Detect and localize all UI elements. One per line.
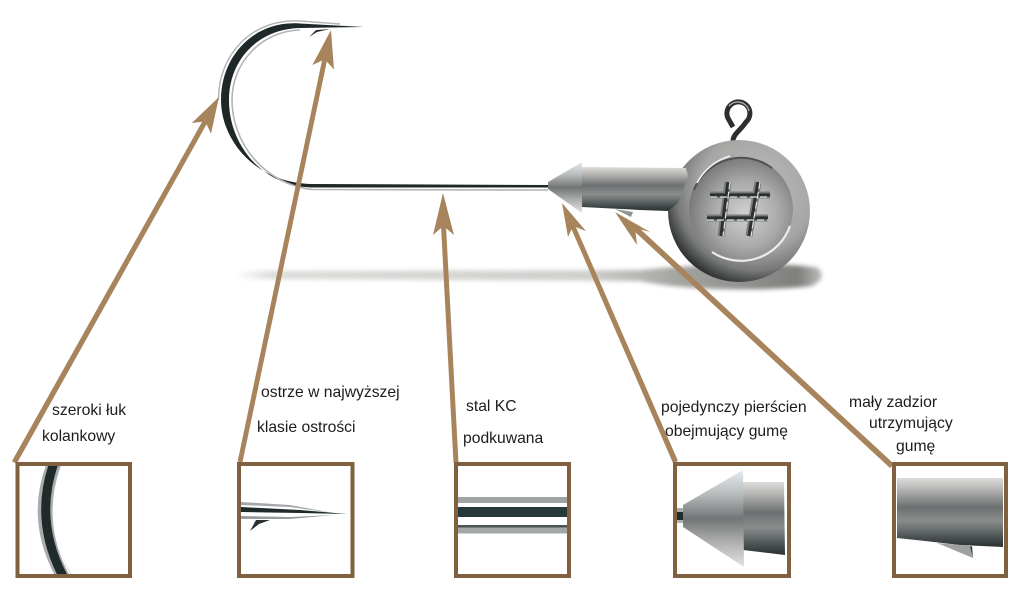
label: wide bend: kolankowy [42, 428, 115, 445]
arrow: point [238, 30, 334, 462]
label: ring: pojedynczy pierścien [661, 399, 807, 416]
label: ring [661, 399, 807, 440]
ball [668, 140, 810, 282]
panel: point detail [239, 464, 352, 576]
label: keeper: utrzymujący [869, 415, 953, 432]
small barb [615, 209, 633, 217]
ball face [689, 156, 793, 261]
panel: bend detail [18, 460, 130, 580]
arrow: shank [433, 193, 458, 463]
label: point [257, 384, 400, 436]
screw eye [727, 102, 750, 141]
label: steel: stal KC [466, 398, 517, 415]
icon: hook barb [309, 29, 330, 37]
label: point: klasie ostrości [257, 419, 356, 436]
arrow: wide bend [12, 97, 219, 464]
label: wide bend [42, 402, 126, 445]
label: keeper: mały zadzior [849, 394, 937, 411]
hook wire [218, 21, 548, 190]
ground shadow [236, 264, 822, 289]
label: point: ostrze w najwyższej [261, 384, 400, 401]
label: steel [463, 398, 544, 447]
label: steel: podkuwana [463, 430, 544, 447]
hash mark [707, 182, 770, 236]
cone ring [548, 162, 582, 213]
panel: steel detail [456, 464, 569, 576]
arrow: ring [562, 203, 678, 463]
label: wide bend: szeroki łuk [52, 402, 126, 419]
panel: ring detail [675, 464, 789, 576]
label: ring: obejmujący gumę [665, 423, 788, 440]
body [582, 167, 688, 211]
label: keeper: gumę [896, 438, 936, 455]
panel: keeper detail [894, 464, 1006, 576]
jig head [548, 102, 810, 282]
label: keeper [849, 394, 953, 455]
arrow: bait keeper [615, 212, 894, 468]
